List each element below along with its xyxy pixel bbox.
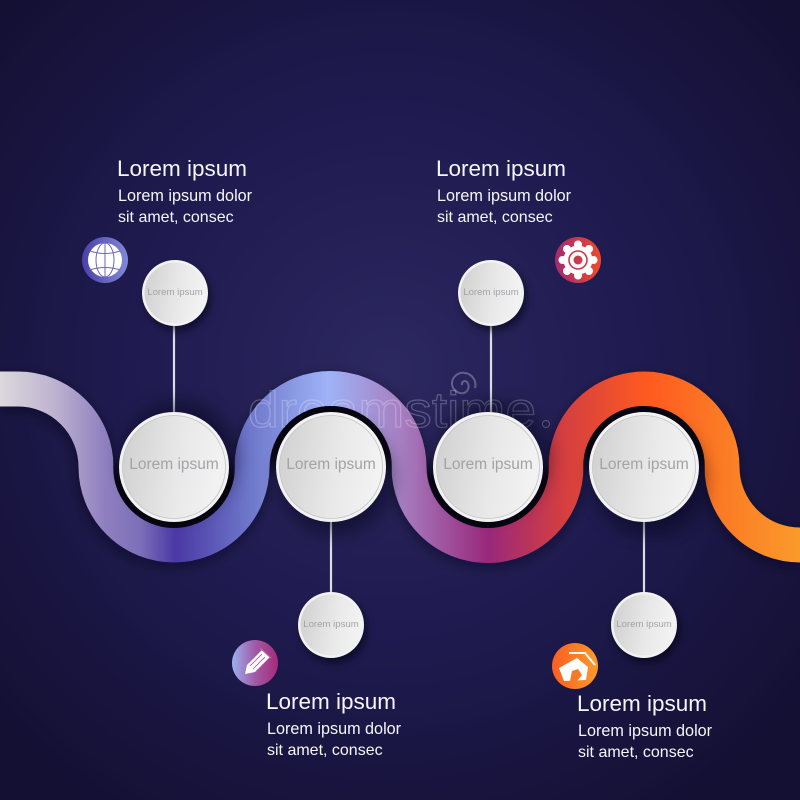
small node 4: Lorem ipsum: [616, 619, 672, 630]
winding gradient ribbon: [0, 388, 800, 546]
node 3: Lorem ipsum: [443, 456, 533, 473]
ribbon shadow: [0, 392, 800, 550]
small node 1: [142, 260, 211, 331]
text block 1: Lorem ipsum: [117, 156, 247, 181]
node 3: [427, 402, 549, 528]
text block 2: Lorem ipsum: [436, 156, 566, 181]
small node 4: [611, 592, 680, 663]
small node 3: [298, 592, 367, 663]
text block 4: Lorem ipsum: [577, 691, 707, 716]
text block 2: Lorem ipsum dolor: [437, 187, 572, 205]
text block 3: Lorem ipsum: [266, 689, 396, 714]
text block 1: [117, 156, 253, 226]
text block 4: sit amet, consec: [578, 744, 694, 761]
node 1: Lorem ipsum: [129, 456, 219, 473]
node 1: [113, 402, 236, 528]
node 2: Lorem ipsum: [286, 456, 376, 473]
icon: globe: [82, 237, 128, 283]
node 4: Lorem ipsum: [599, 456, 689, 473]
text block 4: [577, 691, 713, 761]
text block 2: sit amet, consec: [437, 209, 553, 226]
text block 1: Lorem ipsum dolor: [118, 187, 253, 205]
text block 4: Lorem ipsum dolor: [578, 722, 713, 740]
node 4: [583, 406, 705, 534]
small node 2: Lorem ipsum: [463, 287, 519, 298]
small node 2: [458, 260, 527, 331]
text block 3: Lorem ipsum dolor: [267, 720, 402, 738]
icon: pencil: [232, 640, 278, 686]
icon: gear: [555, 237, 601, 283]
text block 3: [266, 689, 402, 759]
text block 1: sit amet, consec: [118, 209, 234, 226]
connector lines: [174, 320, 644, 596]
small node 3: Lorem ipsum: [303, 619, 359, 630]
node 2: [270, 406, 392, 534]
icon: house tools: [552, 643, 598, 689]
watermark: dreamstime: [248, 382, 536, 438]
small node 1: Lorem ipsum: [147, 287, 203, 298]
text block 2: [436, 156, 572, 226]
text block 3: sit amet, consec: [267, 742, 383, 759]
